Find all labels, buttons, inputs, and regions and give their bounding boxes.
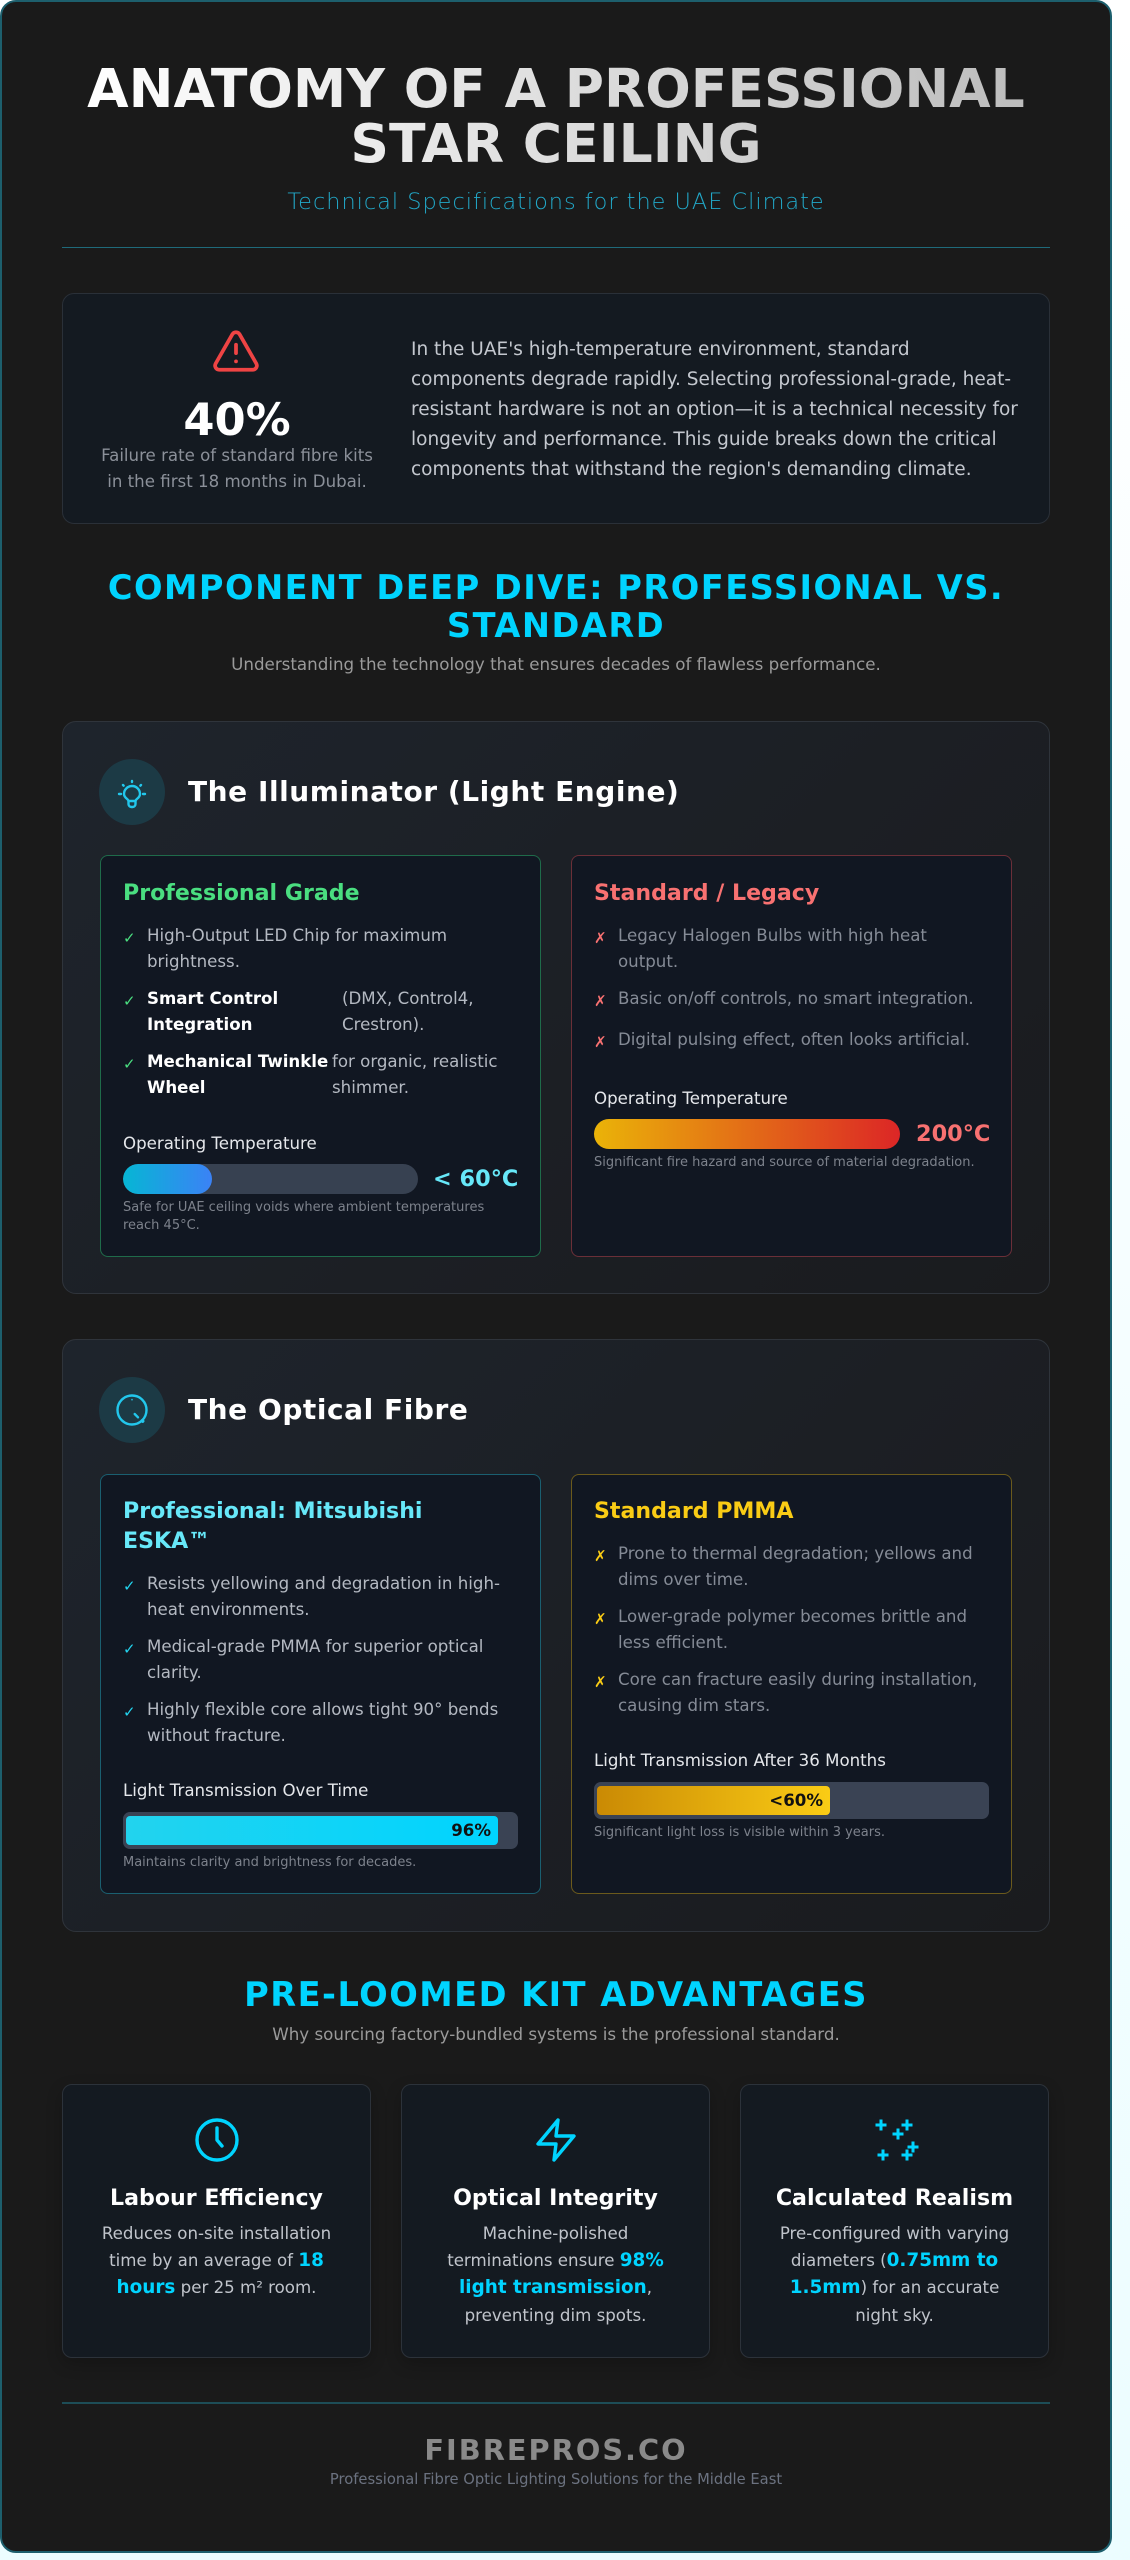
value: 200 degrees: 200°C	[916, 1121, 990, 1147]
cross item 1	[594, 926, 927, 971]
card: professional grade	[100, 855, 541, 1257]
card: standard pmma	[571, 1474, 1012, 1894]
note: reach 45°C.	[123, 1218, 200, 1233]
cross item 2: Lower-grade polymer becomes brittle and	[618, 1607, 967, 1626]
checklist item 1: High-Output LED Chip for maximum	[147, 926, 447, 945]
card: mitsubishi eska	[100, 1474, 541, 1894]
cross item 3: ✗	[594, 1033, 607, 1051]
label: light transmission: Light Transmission After 36 Months	[594, 1751, 886, 1770]
icon: warning triangle	[213, 330, 259, 372]
bar: under 60 percent	[594, 1782, 989, 1819]
benefit text: terminations ensure 98%	[447, 2250, 664, 2271]
cross item 1: dims over time.	[618, 1570, 749, 1589]
note	[123, 1200, 484, 1233]
card heading: Standard / Legacy	[594, 880, 819, 906]
label: light transmission: Light Transmission Over Time	[123, 1781, 368, 1800]
benefit text: light transmission,	[459, 2277, 652, 2298]
section subheading: Why sourcing factory-bundled systems is the professional standard.	[272, 2024, 840, 2044]
statistic caption	[101, 446, 373, 491]
benefit text	[780, 2224, 1009, 2325]
statistic caption: in the first 18 months in Dubai.	[107, 472, 367, 491]
section heading: component deep dive: COMPONENT DEEP DIVE: PROFESSIONAL VS.	[108, 568, 1004, 607]
title: STAR CEILING	[350, 112, 762, 175]
cross item 2	[594, 1607, 967, 1652]
checklist item 1: ✓	[123, 929, 136, 947]
footer tagline: Professional Fibre Optic Lighting Solutions for the Middle East	[330, 2471, 782, 2488]
cross item 3: Core can fracture easily during installation,	[618, 1670, 977, 1689]
title: ANATOMY OF A PROFESSIONAL	[87, 57, 1025, 120]
section heading: component deep dive	[108, 568, 1004, 644]
benefit text: time by an average of 18	[109, 2250, 324, 2271]
checklist item 3: shimmer.	[332, 1078, 409, 1097]
benefit text: preventing dim spots.	[465, 2306, 646, 2325]
section subheading: Understanding the technology that ensures decades of flawless performance.	[231, 654, 881, 674]
icon: fibre dial	[99, 1377, 165, 1443]
note: Maintains clarity and brightness for decades.	[123, 1855, 416, 1870]
intro paragraph: components degrade rapidly. Selecting professional-grade, heat-	[411, 369, 1011, 390]
card heading: Standard PMMA	[594, 1498, 794, 1524]
benefit card: labour efficiency	[62, 2084, 371, 2358]
checklist item 3: Mechanical Twinkle	[147, 1052, 328, 1071]
checklist item 3: without fracture.	[147, 1726, 286, 1745]
benefit text: 1.5mm) for an accurate	[790, 2277, 999, 2298]
icon: sparkling stars	[876, 2120, 918, 2160]
subtitle: Technical Specifications for the UAE Climate	[287, 189, 825, 215]
checklist item 3: Wheel	[147, 1078, 205, 1097]
cross item 1	[594, 1544, 973, 1589]
checklist item 1: brightness.	[147, 952, 240, 971]
checklist item 2: Crestron).	[342, 1015, 424, 1034]
benefit text: Reduces on-site installation	[102, 2224, 331, 2243]
footer brand: FIBREPROS.CO	[424, 2433, 688, 2467]
checklist item 3: ✓	[123, 1055, 136, 1073]
title	[87, 57, 1025, 175]
cross item 1: ✗	[594, 1547, 607, 1565]
panel heading: The Optical Fibre	[188, 1393, 468, 1426]
benefit text	[102, 2224, 331, 2298]
intro paragraph: components that withstand the region's demanding climate.	[411, 459, 972, 480]
checklist item 2: ✓	[123, 992, 136, 1010]
checklist item 3: Highly flexible core allows tight 90° bends	[147, 1700, 498, 1719]
note: Significant light loss is visible within 3 years.	[594, 1825, 885, 1840]
statistic caption: Failure rate of standard fibre kits	[101, 446, 373, 465]
label: operating temperature: Operating Temperature	[123, 1134, 317, 1153]
panel: intro statistic	[62, 293, 1050, 524]
checklist item 2	[123, 989, 474, 1034]
cross item 3	[594, 1670, 977, 1715]
cross item 1: Legacy Halogen Bulbs with high heat	[618, 926, 927, 945]
cross item 1: output.	[618, 952, 678, 971]
card heading: ESKA™	[123, 1528, 210, 1554]
checklist item 3: ✓	[123, 1703, 136, 1721]
bar: under 60 percent: <60%	[769, 1791, 823, 1810]
cross item 2: ✗	[594, 1610, 607, 1628]
checklist item 1	[123, 1574, 500, 1619]
benefit title: Labour Efficiency	[110, 2185, 323, 2211]
icon: lightning bolt	[536, 2118, 576, 2162]
note: Significant fire hazard and source of material degradation.	[594, 1155, 975, 1170]
intro paragraph: In the UAE's high-temperature environment, standard	[411, 339, 910, 360]
cross item 3: ✗	[594, 1673, 607, 1691]
card heading	[123, 1498, 422, 1554]
checklist item 1	[123, 926, 447, 971]
card heading: Professional: Mitsubishi	[123, 1498, 422, 1524]
statistic: 40%: 40%	[183, 393, 291, 446]
checklist item 2: Medical-grade PMMA for superior optical	[147, 1637, 483, 1656]
benefit text: hours per 25 m² room.	[117, 2277, 316, 2298]
cross item 2: Basic on/off controls, no smart integration.	[618, 989, 974, 1008]
checklist item 3: for organic, realistic	[332, 1052, 498, 1071]
checklist item 2	[123, 1637, 483, 1682]
note: Safe for UAE ceiling voids where ambient temperatures	[123, 1200, 484, 1215]
checklist item 1: heat environments.	[147, 1600, 310, 1619]
cross item 2: ✗	[594, 992, 607, 1010]
label: operating temperature: Operating Temperature	[594, 1089, 788, 1108]
intro paragraph	[411, 339, 1018, 480]
benefit text: Pre-configured with varying	[780, 2224, 1009, 2243]
benefit title: Optical Integrity	[453, 2185, 658, 2211]
icon: light bulb	[99, 759, 165, 825]
checklist item 2: (DMX, Control4,	[342, 989, 474, 1008]
benefit card: optical integrity	[401, 2084, 710, 2358]
bar: 96 percent	[123, 1812, 518, 1849]
benefit text: Machine-polished	[483, 2224, 628, 2243]
cross item 3: causing dim stars.	[618, 1696, 770, 1715]
cross item 2: less efficient.	[618, 1633, 728, 1652]
bar: temperature 200	[594, 1119, 900, 1149]
card heading: Professional Grade	[123, 880, 360, 906]
checklist item 2: Smart Control	[147, 989, 278, 1008]
intro paragraph: longevity and performance. This guide breaks down the critical	[411, 429, 997, 450]
intro paragraph: resistant hardware is not an option—it is a technical necessity for	[411, 399, 1018, 420]
panel: the illuminator	[62, 721, 1050, 1294]
benefit card: calculated realism	[740, 2084, 1049, 2358]
benefit text: diameters (0.75mm to	[791, 2250, 998, 2271]
benefit text	[447, 2224, 664, 2325]
cross item 1: Prone to thermal degradation; yellows and	[618, 1544, 973, 1563]
value: under 60 degrees: < 60°C	[433, 1166, 518, 1192]
card: standard legacy	[571, 855, 1012, 1257]
benefit text: night sky.	[855, 2306, 934, 2325]
checklist item 3	[123, 1700, 498, 1745]
section heading: pre-loomed kit advantages: PRE-LOOMED KIT ADVANTAGES	[244, 1975, 868, 2014]
checklist item 2: clarity.	[147, 1663, 202, 1682]
panel heading: The Illuminator (Light Engine)	[188, 775, 679, 808]
checklist item 2: ✓	[123, 1640, 136, 1658]
section heading: component deep dive: STANDARD	[447, 606, 665, 644]
checklist item 3	[123, 1052, 498, 1097]
bar: temperature under 60	[123, 1164, 418, 1194]
icon: clock	[195, 2118, 239, 2162]
bar: 96 percent: 96%	[451, 1821, 491, 1840]
cross item 3: Digital pulsing effect, often looks artificial.	[618, 1030, 970, 1049]
checklist item 1: ✓	[123, 1577, 136, 1595]
checklist item 1: Resists yellowing and degradation in high-	[147, 1574, 500, 1593]
checklist item 2: Integration	[147, 1015, 252, 1034]
panel: the optical fibre	[62, 1339, 1050, 1932]
benefit title: Calculated Realism	[776, 2185, 1013, 2211]
cross item 1: ✗	[594, 929, 607, 947]
